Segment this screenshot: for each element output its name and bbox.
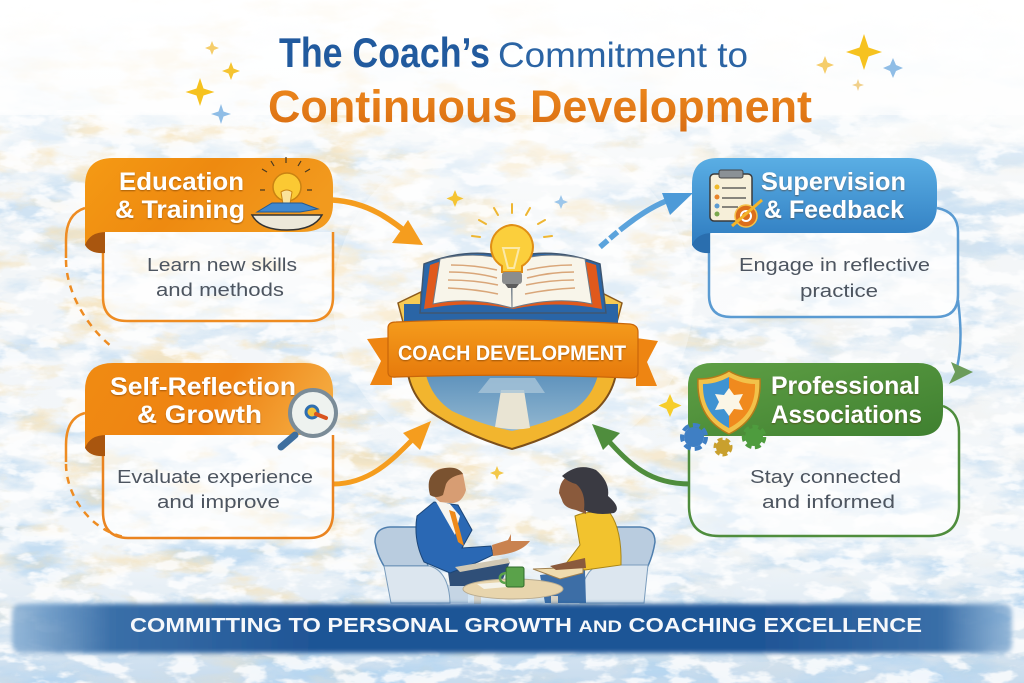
card description: Evaluate experience xyxy=(117,466,313,487)
connector arrow: education to center xyxy=(332,200,423,245)
title xyxy=(268,29,812,132)
card description: Stay connected xyxy=(750,466,901,487)
icon: lightbulb xyxy=(472,204,552,288)
panel: supervision and feedback xyxy=(692,158,958,317)
illustration: coach and client xyxy=(375,467,655,604)
heading text: & Growth xyxy=(137,401,262,429)
card body xyxy=(709,208,958,317)
footer band xyxy=(12,604,1012,653)
card description: Learn new skills xyxy=(147,254,297,275)
icon: green mug xyxy=(500,567,524,587)
icon: lightbulb over book xyxy=(252,157,322,230)
connector arrow: supervision to professional associations xyxy=(949,300,973,384)
title: The Coach’s xyxy=(279,29,490,76)
sparkles: top right xyxy=(816,34,903,91)
icon: clipboard with target xyxy=(710,170,762,227)
heading text: Supervision xyxy=(761,168,906,196)
icon: magnifying glass xyxy=(281,390,336,447)
heading text: & Training xyxy=(115,196,245,224)
ribbon heading xyxy=(85,363,333,448)
heading text: & Feedback xyxy=(764,196,904,224)
banner label: COACH DEVELOPMENT xyxy=(398,342,626,365)
emblem: coach development xyxy=(367,204,658,449)
ribbon fold xyxy=(692,225,710,253)
ribbon fold xyxy=(85,428,105,456)
connector arrow: center to supervision xyxy=(600,193,693,247)
client figure xyxy=(533,467,621,603)
ribbon heading xyxy=(688,363,943,436)
dashed side connector xyxy=(66,413,124,537)
dashed side connector xyxy=(66,208,112,347)
card description xyxy=(739,254,930,301)
icon: puzzle gears xyxy=(682,425,764,455)
left armchair xyxy=(375,527,468,603)
card description xyxy=(750,466,901,512)
sparkles: center xyxy=(446,190,682,480)
open book xyxy=(420,253,606,313)
right armchair xyxy=(580,527,655,603)
heading text xyxy=(115,168,245,224)
coffee table xyxy=(463,579,563,604)
card body xyxy=(103,232,333,321)
heading text: Professional xyxy=(771,372,920,400)
coach figure xyxy=(416,468,530,586)
card body xyxy=(689,406,959,536)
card description: and improve xyxy=(157,491,280,512)
card description: Engage in reflective xyxy=(739,254,930,275)
card description xyxy=(147,254,297,300)
card description: and informed xyxy=(762,491,895,512)
ribbon fold xyxy=(85,225,105,253)
heading text xyxy=(761,168,906,224)
sparkles: top left xyxy=(186,41,240,124)
card description xyxy=(117,466,313,512)
heading text: Self-Reflection xyxy=(110,373,296,401)
card description: practice xyxy=(800,280,878,301)
footer text: COMMITTING TO PERSONAL GROWTH AND COACHING EXCELLENCE xyxy=(130,615,922,637)
heading text xyxy=(110,373,296,429)
banner tails xyxy=(367,337,658,386)
panel: education and training xyxy=(66,157,333,347)
panel: professional associations xyxy=(682,363,959,536)
ribbon heading xyxy=(85,158,333,245)
card body xyxy=(103,435,333,538)
heading text: Associations xyxy=(771,401,922,429)
connector arrow: self-reflection to center xyxy=(333,421,431,484)
banner xyxy=(388,320,638,378)
connector arrow: professional associations to center xyxy=(592,424,690,484)
icon: shield xyxy=(698,371,760,434)
heading text: Education xyxy=(119,168,244,196)
heading text xyxy=(771,372,922,429)
ribbon heading xyxy=(692,158,937,245)
card description: and methods xyxy=(156,279,284,300)
title: Continuous Development xyxy=(268,81,812,132)
panel: self-reflection and growth xyxy=(66,363,336,538)
title: Commitment to xyxy=(498,36,748,75)
shield xyxy=(398,292,622,449)
